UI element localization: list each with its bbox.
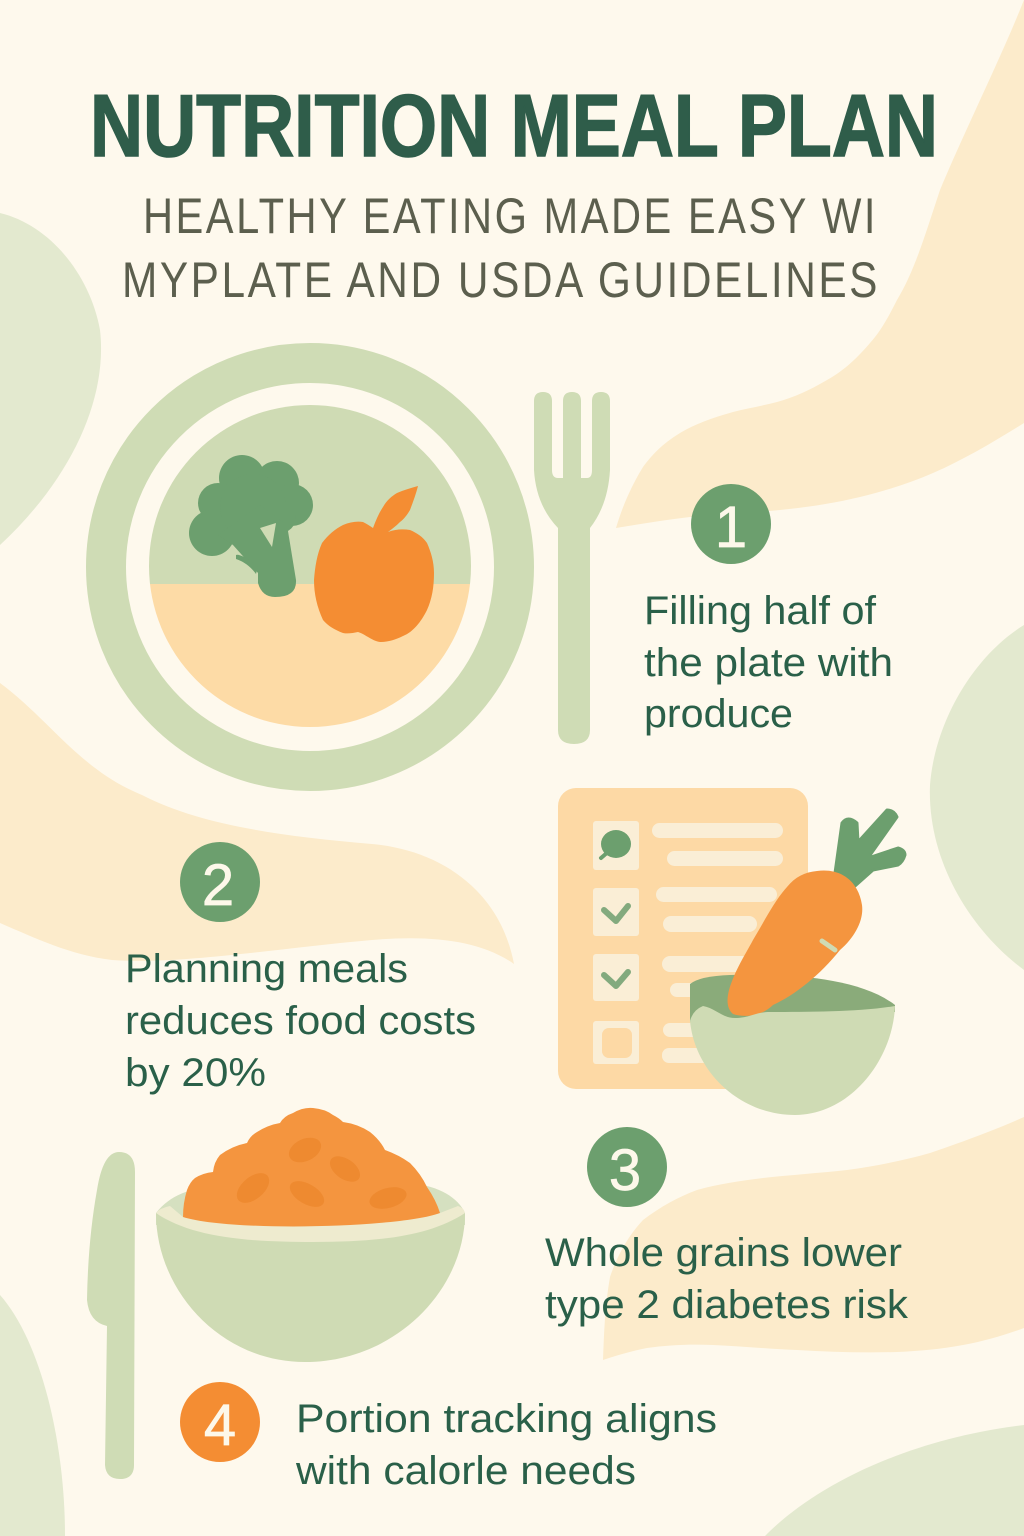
icon: bowl with carrot	[690, 810, 905, 1115]
text 4: with calorle needs	[295, 1449, 636, 1493]
text 1: produce	[644, 692, 793, 736]
subtitle: HEALTHY EATING MADE EASY WI	[143, 188, 878, 244]
text 1: the plate with	[644, 641, 893, 685]
badge 2	[180, 842, 260, 922]
icon: checklist	[558, 788, 808, 1089]
badge 4	[180, 1382, 260, 1462]
step 3	[545, 1127, 909, 1327]
step 2	[125, 842, 476, 1095]
text 2: reduces food costs	[125, 999, 476, 1043]
text 3: type 2 diabetes risk	[545, 1283, 909, 1327]
text 2: Planning meals	[125, 947, 408, 991]
badge 3	[587, 1127, 667, 1207]
icon: grain bowl	[156, 1108, 465, 1362]
text 4: Portion tracking aligns	[296, 1397, 717, 1441]
text 4	[295, 1397, 717, 1493]
text 1: Filling half of	[644, 589, 877, 633]
step 1	[644, 484, 893, 736]
icon: fork	[534, 392, 610, 744]
text 3: Whole grains lower	[545, 1231, 902, 1275]
step 4	[180, 1382, 717, 1493]
icon: plate with broccoli and apple	[106, 363, 514, 771]
subtitle	[122, 188, 880, 308]
badge 1	[691, 484, 771, 564]
badge 4: 4	[204, 1393, 236, 1458]
subtitle: MYPLATE AND USDA GUIDELINES	[122, 252, 880, 308]
food mound	[183, 1108, 440, 1226]
badge 2: 2	[202, 853, 234, 918]
badge 1: 1	[715, 495, 747, 560]
icon: carrot	[728, 810, 905, 1016]
text 2	[125, 947, 476, 1095]
text 1	[644, 589, 893, 736]
badge 3: 3	[609, 1138, 641, 1203]
text 3	[545, 1231, 909, 1327]
text 2: by 20%	[125, 1051, 266, 1095]
icon: apple	[314, 486, 434, 642]
icon: broccoli	[189, 455, 313, 597]
icon: knife	[87, 1152, 135, 1479]
